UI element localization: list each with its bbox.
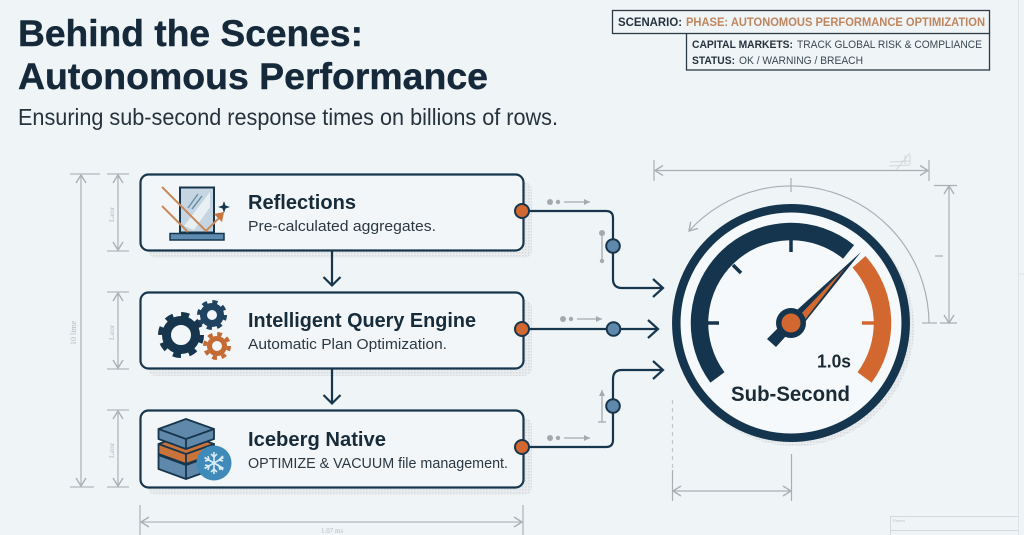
scenario legend box: STATUS:	[692, 55, 735, 67]
scenario legend box: PHASE: AUTONOMOUS PERFORMANCE OPTIMIZATION	[686, 15, 985, 29]
dimension labels: 10 lime	[69, 320, 78, 345]
gauge orange arc	[859, 262, 882, 377]
connector: iceberg to gauge	[515, 361, 663, 454]
scenario legend box: SCENARIO:	[618, 15, 682, 29]
heading: intelligent query engine: Intelligent Query Engine	[248, 310, 476, 332]
dimension labels: Lator	[108, 324, 116, 340]
scenario legend box	[612, 10, 990, 70]
title: Autonomous Performance	[18, 56, 488, 97]
gauge hatch shadow	[676, 208, 914, 446]
dimension labels	[69, 206, 343, 535]
subtitle: Ensuring sub-second response times on billions of rows.	[18, 104, 558, 130]
panel: iceberg native	[140, 410, 532, 495]
gauge needle	[767, 252, 861, 347]
dimension lines: left and bottom	[70, 174, 523, 535]
dimension lines: gauge	[654, 153, 957, 501]
heading: iceberg native: Iceberg Native	[248, 429, 386, 451]
icon: mirror reflecting light	[162, 187, 230, 240]
heading: reflections: Reflections	[248, 192, 356, 214]
title	[18, 13, 488, 97]
gauge face	[676, 208, 906, 438]
scenario legend box: OK / WARNING / BREACH	[739, 55, 863, 67]
gauge	[676, 208, 914, 446]
dimension labels: Lator	[108, 206, 116, 222]
title block corner	[890, 516, 1018, 535]
gauge label: Sub-Second	[731, 383, 850, 406]
title: Behind the Scenes:	[18, 13, 363, 54]
text: engine description: Automatic Plan Optimization.	[248, 336, 447, 353]
icon: gears	[161, 302, 229, 358]
icon: stacked file layers with snowflake	[158, 419, 232, 480]
text: reflections description: Pre-calculated aggregates.	[248, 218, 436, 235]
arrow: engine to iceberg	[324, 369, 340, 404]
connector: engine to gauge	[515, 320, 658, 338]
dimension labels: Lator	[108, 442, 116, 458]
scenario legend box: TRACK GLOBAL RISK & COMPLIANCE	[797, 39, 982, 51]
text: iceberg description: OPTIMIZE & VACUUM file management.	[248, 455, 508, 472]
gauge ticks	[708, 240, 874, 323]
title block corner: Parent	[893, 518, 906, 523]
flow direction markers	[547, 199, 606, 441]
connector: reflections to gauge	[515, 204, 663, 297]
panel: reflections	[140, 174, 532, 258]
arrow: reflections to engine	[324, 251, 340, 286]
scenario legend box: CAPITAL MARKETS:	[692, 39, 793, 51]
gauge value: 1.0s	[817, 352, 851, 372]
gauge dark arc	[700, 232, 849, 377]
panel: intelligent query engine	[140, 292, 532, 376]
dimension labels: 1.07 ms	[321, 527, 343, 535]
